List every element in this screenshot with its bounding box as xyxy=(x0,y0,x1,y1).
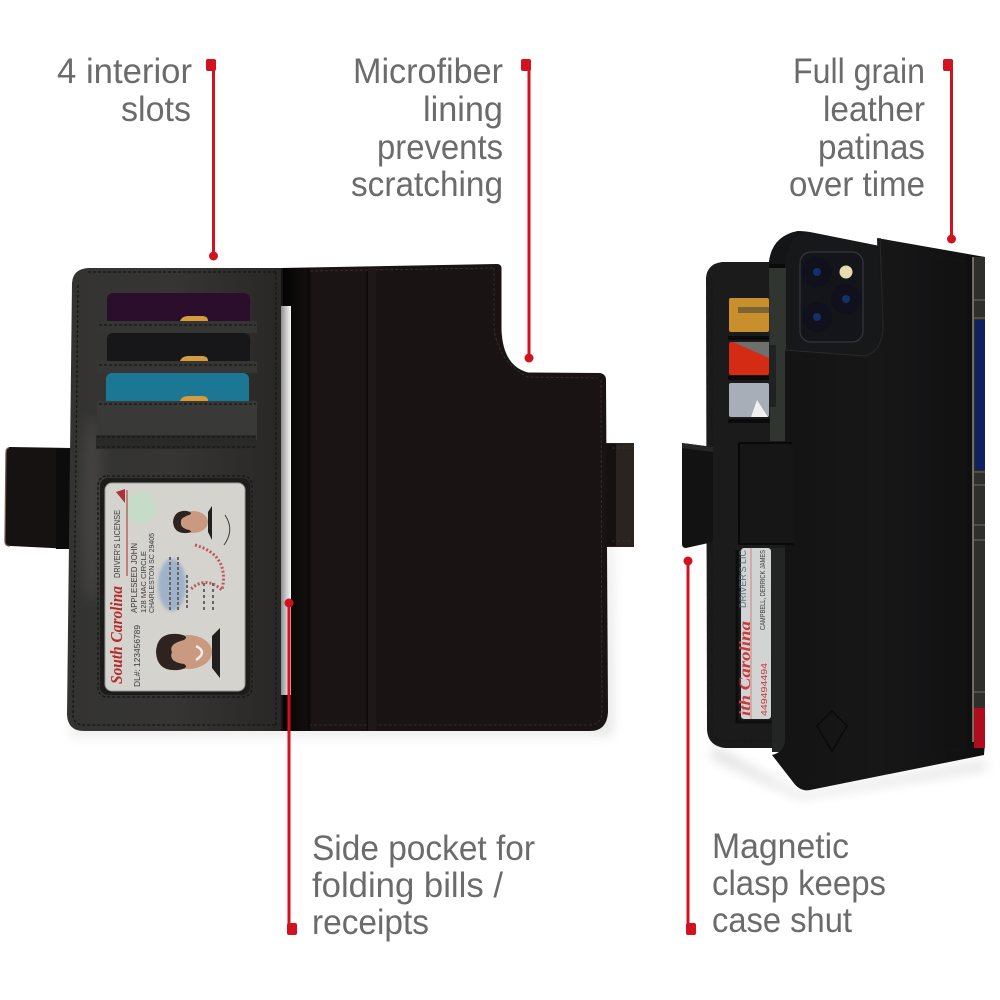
case shadow xyxy=(710,748,988,798)
label: side pocket: Side pocket for xyxy=(312,829,535,868)
ID strip: ith Carolina xyxy=(737,621,754,716)
leader: microfiber lining xyxy=(521,59,534,362)
ID strip: CAMPBELL, DERRICK JAMES xyxy=(758,550,767,630)
left tab xyxy=(5,447,72,549)
label: microfiber lining xyxy=(351,52,503,204)
ID strip: 449494494 xyxy=(760,662,769,716)
leader: side pocket xyxy=(284,598,297,935)
label: full grain leather xyxy=(789,52,925,204)
grey card xyxy=(729,383,769,417)
large portrait xyxy=(156,628,220,678)
label: side pocket: receipts xyxy=(312,903,429,942)
ID text: DRIVER'S LICENSE xyxy=(113,510,122,578)
label: microfiber lining: prevents xyxy=(377,128,503,167)
magnetic tab xyxy=(682,443,713,548)
ID text: APPLESEED JOHN xyxy=(130,543,139,613)
hologram patches xyxy=(124,492,156,524)
leader: full grain leather xyxy=(943,59,956,244)
panel: right microfiber lining xyxy=(281,264,608,731)
label: 4 interior slots: 4 interior xyxy=(57,52,192,91)
label: full grain leather: over time xyxy=(789,165,925,204)
ID window xyxy=(98,476,252,697)
camera module xyxy=(800,252,863,342)
spine xyxy=(967,255,985,748)
label: magnetic clasp: clasp keeps xyxy=(712,864,886,903)
small portrait xyxy=(173,506,230,545)
ID strip: DRIVER'S LIC xyxy=(738,550,748,608)
ID text: South Carolina xyxy=(107,586,126,684)
teal card xyxy=(106,373,249,411)
gold card xyxy=(729,298,769,332)
label: magnetic clasp: Magnetic xyxy=(712,827,849,866)
phone body xyxy=(769,231,880,752)
brand logo xyxy=(817,711,847,751)
leader: 4 interior slots xyxy=(206,59,218,260)
label: full grain leather: Full grain xyxy=(793,52,925,91)
label: side pocket xyxy=(312,829,535,942)
label: full grain leather: patinas xyxy=(818,128,925,167)
panel: left interior xyxy=(67,268,282,731)
label: microfiber lining: Microfiber xyxy=(353,52,503,91)
ID strip xyxy=(737,548,771,719)
red card xyxy=(729,342,769,375)
label: full grain leather: leather xyxy=(823,90,925,129)
purple card xyxy=(107,293,250,331)
wallet shadow xyxy=(70,420,612,735)
label: 4 interior slots: slots xyxy=(121,90,191,129)
ID text xyxy=(107,489,213,687)
side pocket opening xyxy=(281,306,291,695)
label: microfiber lining: scratching xyxy=(351,165,503,204)
label: magnetic clasp: case shut xyxy=(712,901,852,940)
slot 1 xyxy=(97,321,257,333)
label: 4 interior slots xyxy=(57,52,192,129)
label: side pocket: folding bills / xyxy=(312,866,503,905)
side button xyxy=(769,345,776,407)
clasp strap xyxy=(739,443,795,544)
closed phone case xyxy=(682,231,988,798)
ID text: 128 MAC CIRCLE xyxy=(139,551,148,613)
label: magnetic clasp xyxy=(712,827,886,940)
leader: magnetic clasp xyxy=(684,556,696,935)
panel: inner wallet side xyxy=(706,262,790,748)
right tab xyxy=(600,443,634,547)
panel: leather cover xyxy=(739,238,985,790)
slot 3 xyxy=(97,401,257,440)
slot 2 xyxy=(97,361,257,373)
ID text: CHARLESTON SC 29405 xyxy=(149,533,156,613)
label: microfiber lining: lining xyxy=(423,90,503,129)
black card xyxy=(107,333,250,371)
slot 4 xyxy=(96,435,256,449)
ID text: DL#: 123456789 xyxy=(133,624,142,687)
open wallet case xyxy=(5,264,634,735)
